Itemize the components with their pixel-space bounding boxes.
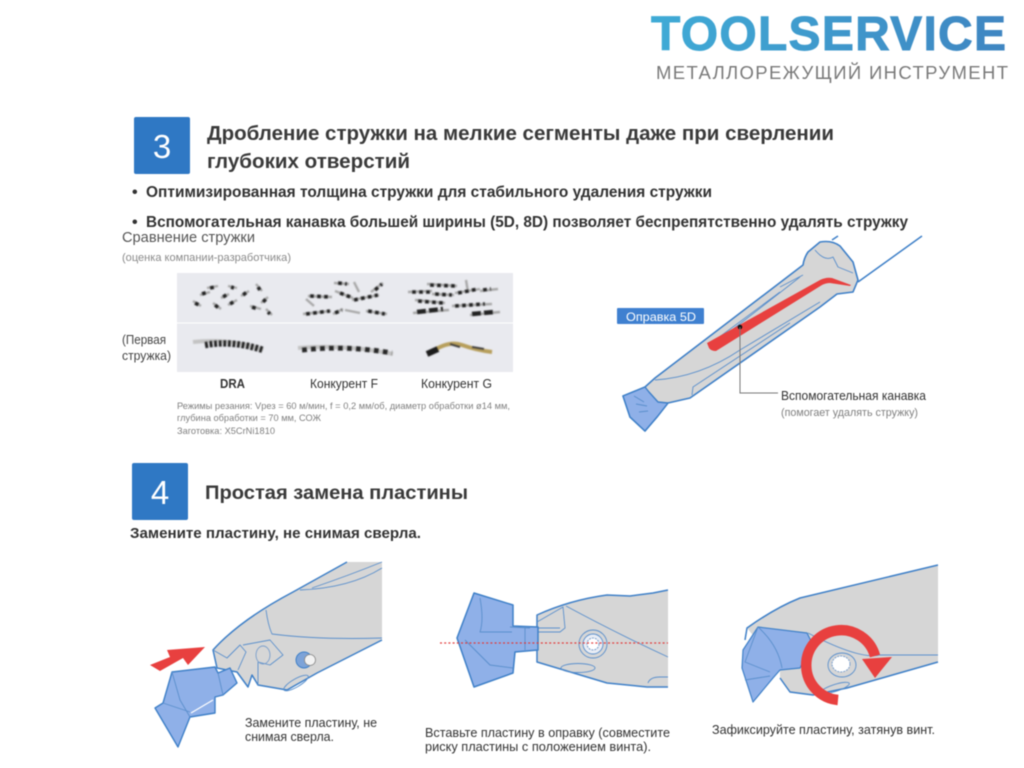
step 2 caption: риску пластины с положением винта). bbox=[425, 740, 651, 754]
section 3 bullet points: Оптимизированная толщина стружки для стабильного удаления стружки bbox=[146, 184, 712, 201]
chips: fragmented top row bbox=[193, 280, 500, 354]
first chip row label: стружка) bbox=[122, 349, 171, 363]
callout: auxiliary groove text: (помогает удалять стружку) bbox=[781, 407, 918, 419]
step 1 drill illustration bbox=[155, 562, 382, 747]
cutting conditions note: глубина обработки = 70 мм, СОЖ bbox=[177, 413, 321, 424]
callout: auxiliary groove text: Вспомогательная канавка bbox=[781, 389, 926, 403]
first chip row label: (Первая bbox=[122, 333, 166, 347]
insert bbox=[742, 627, 812, 702]
step 2 caption: Вставьте пластину в оправку (совместите bbox=[425, 726, 670, 740]
step 2 caption bbox=[425, 726, 670, 754]
arrow: rotate to tighten bbox=[806, 630, 892, 700]
chip comparison heading: (оценка компании-разработчика) bbox=[122, 252, 291, 264]
label: holder 5D bbox=[617, 308, 704, 324]
red alignment line bbox=[440, 642, 668, 644]
chip comparison heading: Сравнение стружки bbox=[122, 230, 255, 246]
screw bbox=[828, 653, 856, 677]
insert bbox=[457, 593, 538, 687]
section 3 bullet points: • bbox=[132, 214, 138, 231]
chip photo panel bbox=[177, 273, 513, 372]
section 3 bullet points bbox=[132, 184, 908, 231]
cutting conditions note bbox=[177, 401, 510, 437]
arrow: insert direction bbox=[150, 647, 205, 671]
section 4 subheading: Замените пластину, не снимая сверла. bbox=[130, 526, 421, 542]
label: holder 5D: Оправка 5D bbox=[626, 310, 696, 324]
section 3 bullet points: • bbox=[132, 184, 138, 201]
step 3 drill illustration bbox=[742, 565, 938, 702]
callout leader line bbox=[740, 327, 778, 393]
logo: TOOLSERVICE bbox=[651, 8, 1006, 61]
section 3 bullet points: Вспомогательная канавка большей ширины (5D, 8D) позволяет беспрепятственно удалять стружку bbox=[146, 214, 908, 231]
section 3 number badge: 3 bbox=[153, 128, 171, 165]
callout: auxiliary groove text bbox=[781, 389, 926, 419]
screw bbox=[579, 630, 607, 658]
chip sample labels: DRA bbox=[220, 377, 245, 391]
drill 5D illustration bbox=[623, 236, 922, 431]
step 2 drill illustration bbox=[457, 590, 668, 687]
section 3 heading: глубоких отверстий bbox=[207, 151, 410, 173]
chip sample labels: Конкурент G bbox=[421, 377, 492, 391]
step 1 caption: Замените пластину, не bbox=[245, 716, 377, 730]
callout dot bbox=[738, 325, 742, 329]
section 4 number badge: 4 bbox=[151, 474, 169, 511]
chips: continuous first chip row bbox=[193, 341, 492, 354]
logo: МЕТАЛЛОРЕЖУЩИЙ ИНСТРУМЕНТ bbox=[656, 62, 1008, 83]
screw bbox=[296, 652, 312, 668]
first chip row label bbox=[122, 333, 171, 363]
section 3 heading: Дробление стружки на мелкие сегменты даже при сверлении bbox=[207, 123, 834, 145]
step 3 caption: Зафиксируйте пластину, затянув винт. bbox=[712, 723, 935, 737]
step 1 caption: снимая сверла. bbox=[245, 730, 334, 744]
section 3 number badge bbox=[134, 117, 190, 174]
chip comparison heading bbox=[122, 230, 291, 264]
section 4 number badge bbox=[132, 463, 188, 520]
insert bbox=[155, 667, 237, 747]
cutting conditions note: Режимы резания: Vрез = 60 м/мин, f = 0,2 мм/об, диаметр обработки ø14 мм, bbox=[177, 401, 510, 412]
red auxiliary groove bbox=[707, 278, 851, 351]
cutting conditions note: Заготовка: X5CrNi1810 bbox=[177, 426, 275, 437]
chip sample labels: Конкурент F bbox=[310, 377, 378, 391]
step 1 caption bbox=[245, 716, 377, 744]
section 4 heading: Простая замена пластины bbox=[205, 483, 468, 504]
chip sample labels bbox=[220, 377, 492, 391]
section 3 heading bbox=[207, 123, 834, 173]
